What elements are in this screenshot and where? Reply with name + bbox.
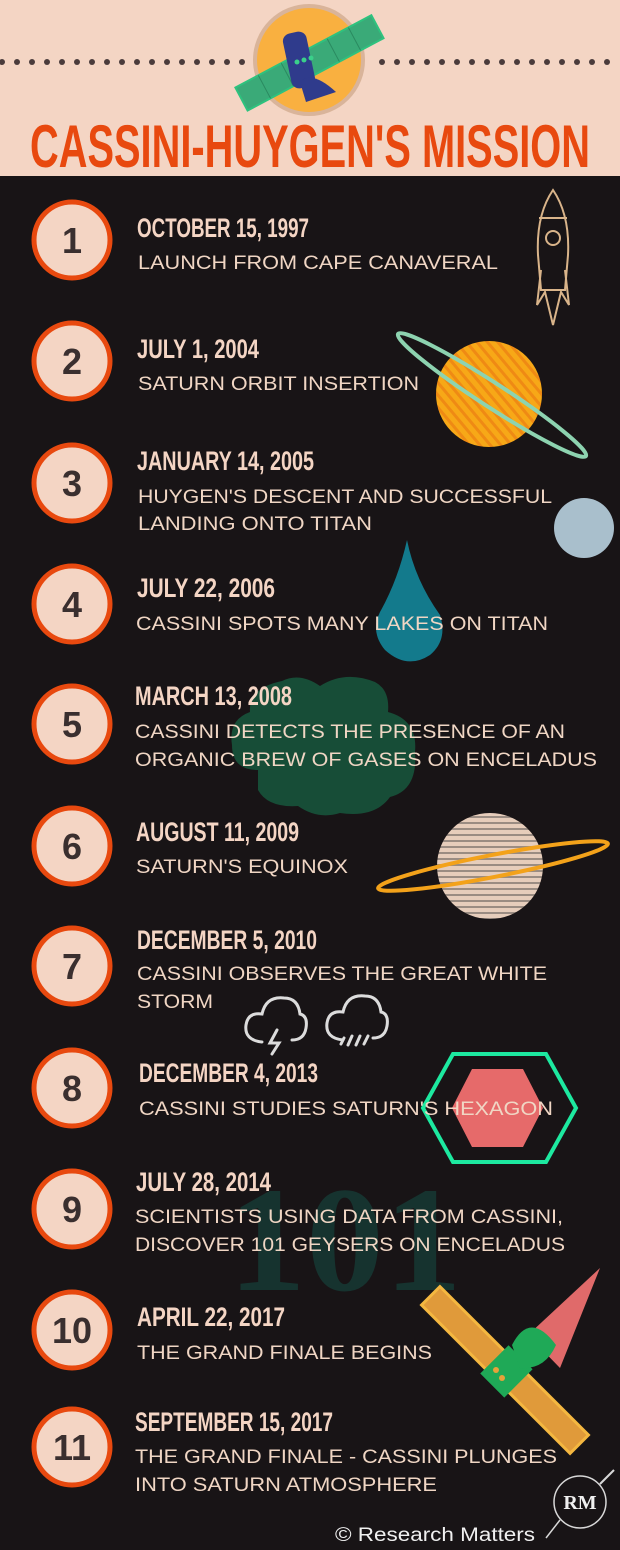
item 5: ORGANIC BREW OF GASES ON ENCELADUS [135, 750, 597, 771]
item 4 [34, 566, 548, 642]
item 4: 4 [62, 584, 82, 625]
item 8: CASSINI STUDIES SATURN'S HEXAGON [139, 1099, 553, 1120]
item 9: 9 [62, 1189, 82, 1230]
item 8: 8 [62, 1068, 82, 1109]
item 1: 1 [62, 220, 82, 261]
icon: titan moon [554, 498, 614, 558]
icon: saturn orange [392, 324, 592, 466]
icon: header satellite [235, 6, 384, 114]
logo: RM: RM [563, 1492, 597, 1514]
icon: storm clouds [246, 996, 387, 1054]
item 7 [34, 925, 547, 1013]
item 5: 5 [62, 704, 82, 745]
item 2 [34, 323, 419, 399]
item 4: CASSINI SPOTS MANY LAKES ON TITAN [136, 614, 548, 635]
decorative: big 101: 101 [228, 1157, 462, 1323]
item 3: JANUARY 14, 2005 [137, 446, 314, 476]
icon: hexagon [423, 1054, 576, 1162]
item 3: HUYGEN'S DESCENT AND SUCCESSFUL [138, 487, 552, 508]
icon: saturn striped [376, 813, 610, 919]
item 3: LANDING ONTO TITAN [138, 514, 372, 535]
icon: water drop [376, 540, 442, 661]
item 11: THE GRAND FINALE - CASSINI PLUNGES [135, 1447, 557, 1468]
item 4: JULY 22, 2006 [137, 573, 275, 603]
item 10: APRIL 22, 2017 [137, 1302, 285, 1332]
item 10: 10 [52, 1310, 92, 1351]
item 5: CASSINI DETECTS THE PRESENCE OF AN [135, 722, 565, 743]
item 11 [34, 1407, 557, 1496]
timeline items [34, 202, 597, 1496]
item 11: INTO SATURN ATMOSPHERE [135, 1475, 437, 1496]
item 10: THE GRAND FINALE BEGINS [137, 1343, 432, 1364]
item 6: 6 [62, 826, 82, 867]
item 1: OCTOBER 15, 1997 [137, 213, 309, 243]
item 6: AUGUST 11, 2009 [136, 817, 299, 847]
icon: cassini satellite [417, 1268, 600, 1458]
item 7: STORM [137, 992, 213, 1013]
item 7: 7 [62, 946, 82, 987]
item 8 [34, 1050, 553, 1126]
item 8: DECEMBER 4, 2013 [139, 1058, 318, 1088]
item 6 [34, 808, 348, 884]
item 9: SCIENTISTS USING DATA FROM CASSINI, [135, 1207, 563, 1228]
item 9: DISCOVER 101 GEYSERS ON ENCELADUS [135, 1235, 565, 1256]
dotted line [0, 59, 610, 65]
item 5 [34, 681, 597, 771]
item 1 [34, 202, 498, 278]
item 9 [34, 1167, 565, 1256]
credit: © Research Matters [335, 1525, 535, 1546]
item 3 [34, 445, 552, 535]
icon: rocket [537, 190, 569, 325]
logo: RM [546, 1470, 614, 1538]
item 3: 3 [62, 463, 82, 504]
item 7: CASSINI OBSERVES THE GREAT WHITE [137, 964, 547, 985]
item 1: LAUNCH FROM CAPE CANAVERAL [138, 253, 498, 274]
item 11: 11 [53, 1427, 91, 1468]
item 9: JULY 28, 2014 [136, 1167, 271, 1197]
item 10 [34, 1292, 432, 1368]
item 2: SATURN ORBIT INSERTION [138, 374, 419, 395]
item 5: MARCH 13, 2008 [135, 681, 292, 711]
header background [0, 0, 620, 176]
item 7: DECEMBER 5, 2010 [137, 925, 317, 955]
item 2: 2 [62, 341, 82, 382]
icon: cloud [231, 677, 415, 815]
item 6: SATURN'S EQUINOX [136, 857, 348, 878]
item 11: SEPTEMBER 15, 2017 [135, 1407, 333, 1437]
item 2: JULY 1, 2004 [137, 334, 259, 364]
